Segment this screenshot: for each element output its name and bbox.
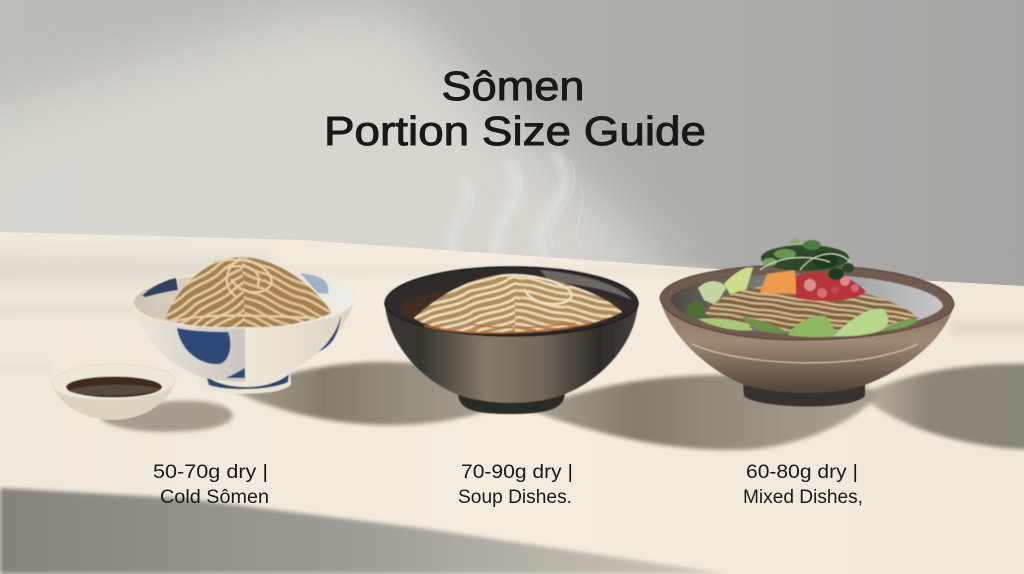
bowl 2 noodles: [414, 274, 622, 333]
table surface: [0, 232, 1024, 574]
bowl 3 body: [660, 298, 954, 393]
title: Portion Size Guide: [324, 108, 706, 154]
bowl 3 pale glaze line: [692, 344, 918, 363]
caption: cold sômen: Cold Sômen: [160, 487, 269, 508]
caption: cold sômen: 50-70g dry |: [153, 462, 268, 483]
bowl 3 front lettuce: [698, 309, 918, 337]
bowl 3 interior: [660, 265, 954, 340]
caption: mixed dishes: 60-80g dry |: [746, 462, 858, 483]
steam above the soup bowl: [450, 155, 583, 262]
bowl 3 red topping: [796, 272, 866, 301]
bowl 1 foot: [198, 368, 291, 394]
bowl 2 foot: [458, 392, 565, 414]
wall background: [0, 0, 1024, 300]
caption: cold sômen: [153, 462, 269, 508]
bowl 1: cold sômen in blue and white bowl: [133, 257, 355, 394]
bowl 1 interior: [133, 272, 355, 328]
bowl 2: soup dish in black bowl: [385, 267, 638, 414]
dipping sauce dish: [52, 364, 175, 420]
caption: soup dishes: 70-90g dry |: [461, 462, 573, 483]
bowl 3 herbs: [760, 238, 854, 280]
bowl 3 orange vegetable: [760, 270, 796, 294]
bowl 2 broth: [399, 286, 623, 332]
caption: mixed dishes: Mixed Dishes,: [743, 487, 863, 508]
title: [324, 63, 706, 154]
table shadow at the bottom: [0, 488, 730, 574]
caption: soup dishes: Soup Dishes.: [458, 487, 572, 508]
bowl 1 blue brush marks: [177, 316, 341, 378]
bowl 3 noodles: [705, 285, 919, 331]
title: Sômen: [442, 63, 584, 109]
bowl 2 body: [385, 304, 638, 403]
soy sauce: [66, 376, 162, 398]
caption: soup dishes: [458, 462, 573, 508]
bowl 3: mixed dish in brown bowl: [660, 238, 954, 407]
bowl 2 interior: [385, 267, 638, 336]
cast shadows of the bowls: [100, 362, 1024, 450]
bowl 3 back lettuce: [686, 267, 753, 318]
bowl 1 noodle pile: [165, 257, 332, 327]
bowl 1 body: [133, 298, 355, 381]
caption: mixed dishes: [743, 462, 863, 508]
bowl 3 foot: [743, 380, 865, 407]
